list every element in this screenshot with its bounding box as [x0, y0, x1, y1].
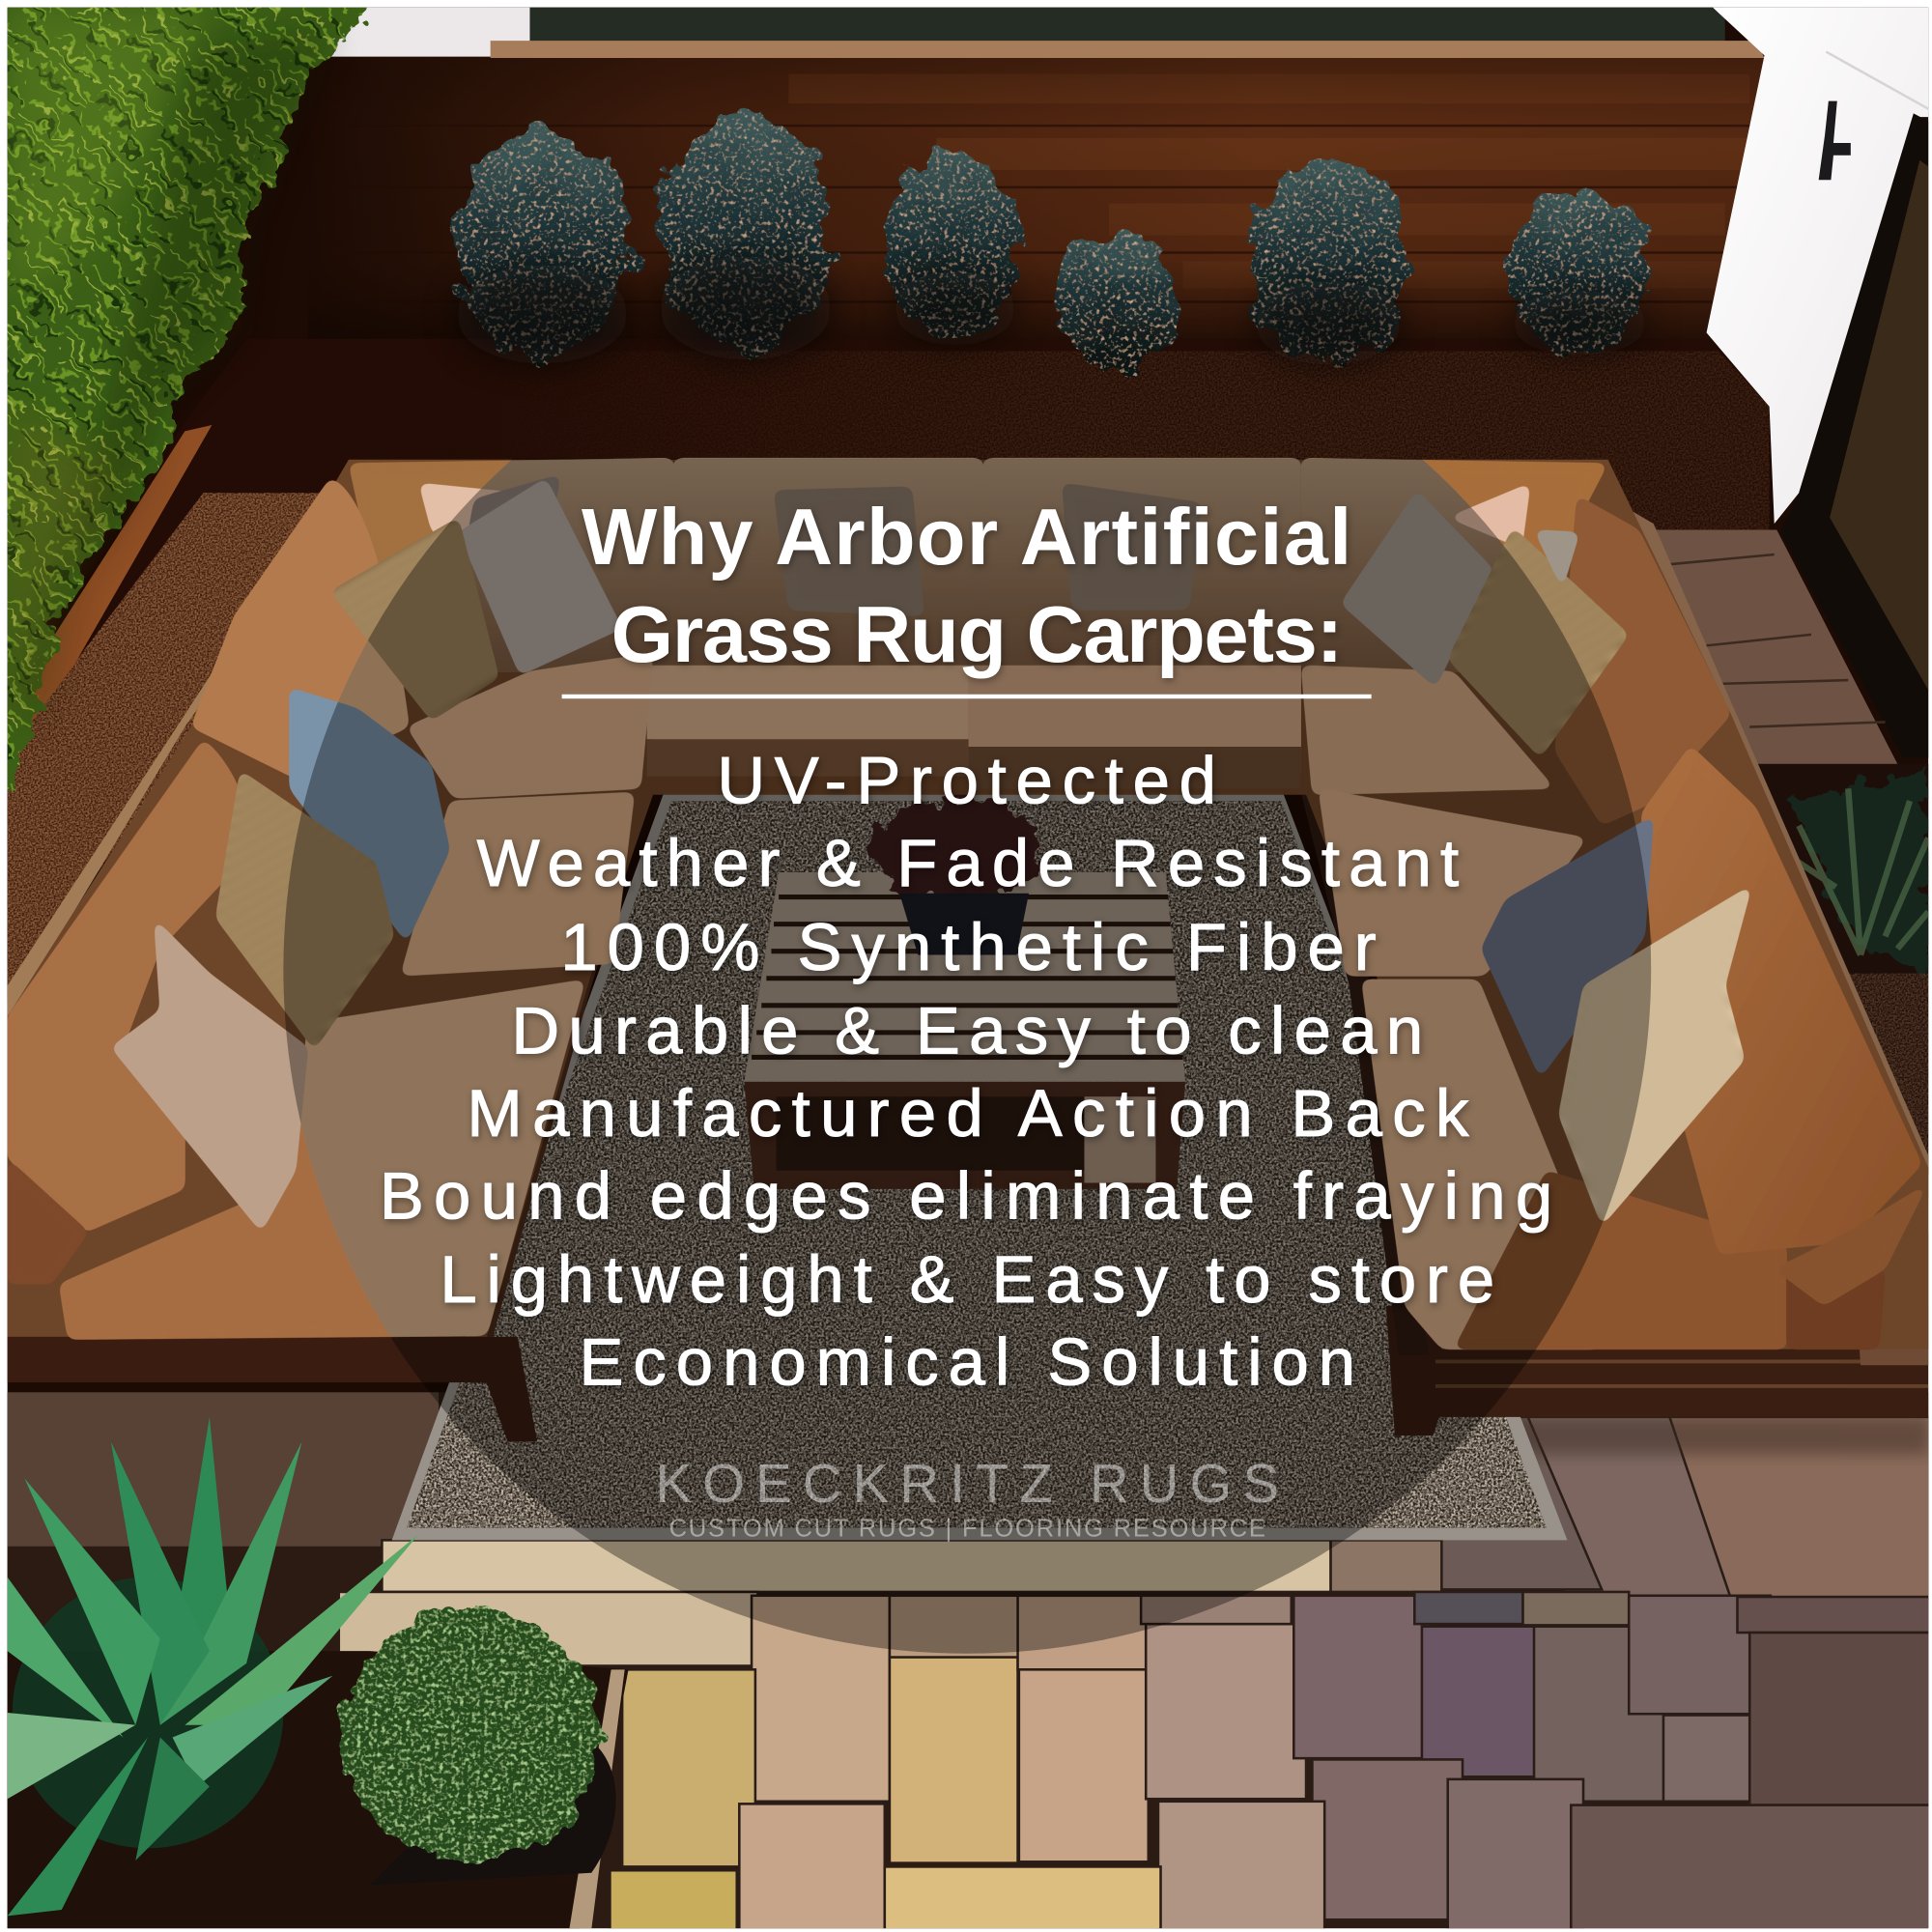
sofa base silhouette	[8, 460, 1929, 1350]
paving stones	[8, 1392, 1931, 1931]
top hedge strip	[327, 8, 1725, 59]
benefits list: UV-Protected	[717, 744, 1216, 818]
dark translucent circle	[283, 286, 1651, 1654]
benefits list: 100% Synthetic Fiber	[560, 910, 1377, 984]
back cushions inside circle	[349, 458, 1608, 671]
title: Why Arbor Artificial	[582, 492, 1351, 582]
rug	[392, 788, 1567, 1540]
benefits list: Weather & Fade Resistant	[477, 826, 1459, 900]
garden bed lower left	[8, 1651, 629, 1932]
left back cushions	[8, 478, 409, 1284]
agave plant	[8, 1417, 419, 1916]
shrubs along wall	[453, 111, 1651, 368]
right stone path	[1645, 529, 1897, 764]
pillows right	[1341, 483, 1752, 1226]
flowering shrub	[341, 1609, 600, 1861]
title divider	[562, 695, 1372, 698]
left front seat inside circle	[59, 980, 585, 1339]
benefits list: Durable & Easy to clean	[511, 994, 1423, 1068]
benefits list: Lightweight & Easy to store	[440, 1242, 1494, 1317]
wall lamp	[1819, 101, 1851, 180]
right garden bed	[1758, 763, 1928, 1176]
title: Grass Rug Carpets:	[611, 589, 1343, 679]
wood retaining wall	[308, 41, 1768, 345]
left seat cushions	[59, 653, 653, 1339]
potted plant	[875, 799, 1042, 955]
benefits list: Bound edges eliminate fraying	[380, 1158, 1552, 1233]
coffee table	[744, 872, 1185, 1189]
center seat cushions	[647, 666, 1301, 788]
benefits list: Manufactured Action Back	[467, 1076, 1469, 1151]
rug watermark	[656, 1453, 1279, 1543]
right seat cushions	[1301, 666, 1886, 1350]
mulch bed	[8, 339, 1770, 1005]
pillows center	[774, 483, 1202, 616]
rug watermark: KOECKRITZ RUGS	[656, 1453, 1279, 1514]
back cushions row	[349, 458, 1608, 671]
benefits list: Economical Solution	[579, 1325, 1355, 1400]
dark glass door	[1780, 113, 1932, 757]
rug watermark: CUSTOM CUT RUGS | FLOORING RESOURCE	[669, 1516, 1265, 1543]
pillows left	[111, 474, 622, 1233]
title	[582, 492, 1351, 679]
right back cushions	[1555, 496, 1928, 1306]
white house wall	[1707, 8, 1932, 524]
left back cushion inside circle	[191, 478, 409, 779]
sofa wood frame	[8, 480, 1929, 1441]
benefits list	[380, 744, 1552, 1400]
bamboo hedge	[0, 0, 394, 788]
terracotta planter edge	[8, 425, 212, 754]
